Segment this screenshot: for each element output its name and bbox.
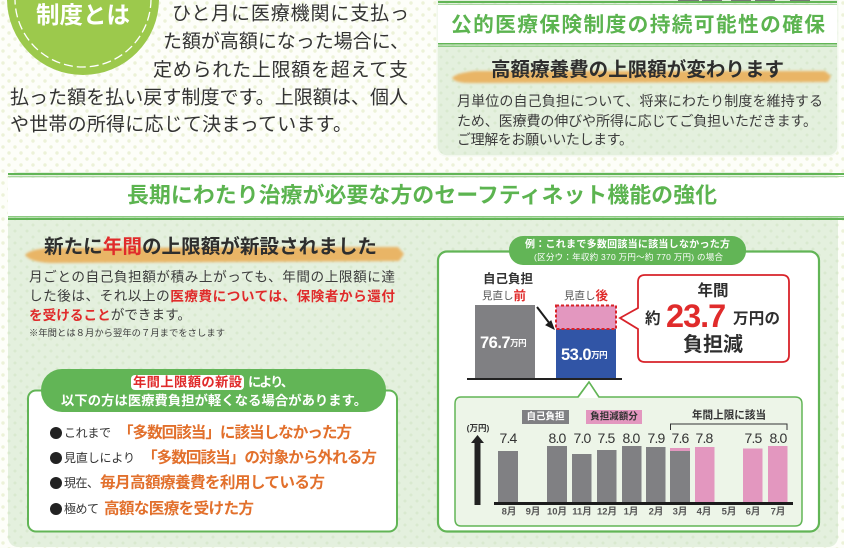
label: after: 見直し後 <box>564 288 608 303</box>
list item 4: 極めて <box>64 502 99 516</box>
panel: example calculation <box>438 236 819 532</box>
month labels: 6月 <box>746 506 760 518</box>
panel: monthly bar chart <box>455 382 802 526</box>
banner: 年間上限額の新設 <box>133 374 242 390</box>
callout: annual reduction <box>620 275 789 362</box>
values: 7.8 <box>695 430 714 446</box>
values: 7.5 <box>597 430 616 446</box>
callout: annual reduction: 年間 <box>697 280 729 300</box>
month labels: 2月 <box>649 506 663 518</box>
month labels: 12月 <box>597 506 617 518</box>
heading: sustainability: 公的医療保険制度の持続可能性の確保 <box>451 14 825 36</box>
month labels: 5月 <box>722 506 736 518</box>
text block: panel body <box>457 93 823 148</box>
values: 7.5 <box>744 430 763 446</box>
banner: により、 <box>248 374 294 390</box>
list item 2: 見直しにより <box>64 450 135 465</box>
example banner <box>509 236 746 265</box>
list item 1: これまで <box>64 426 111 440</box>
right margin strip <box>838 221 844 548</box>
text block: panel body: ご理解をお願いいたします。 <box>457 132 633 148</box>
text block: annual limit explanation: した後は、それ以上の医療費については、保険者から還付 <box>29 288 395 304</box>
list item 2 <box>50 448 377 466</box>
bar: reduction <box>556 306 616 329</box>
values: 7.6 <box>671 430 690 446</box>
list item 2: 「多数回該当」の対象から外れる方 <box>142 448 377 466</box>
text block: annual limit explanation <box>29 270 395 338</box>
bar: after 53.0 <box>556 329 616 378</box>
month labels: 10月 <box>547 506 567 518</box>
values <box>499 430 788 446</box>
text block: system description: ひと月に医療機関に支払っ <box>172 2 409 24</box>
unit and arrow: (万円) <box>467 423 489 433</box>
month labels: 3月 <box>673 506 687 518</box>
list item 1: 「多数回該当」に該当しなかった方 <box>118 422 352 442</box>
values: 8.0 <box>622 430 641 446</box>
legend: reduction <box>586 410 642 424</box>
text block: system description: 払った額を払い戻す制度です。上限額は、個人 <box>10 86 408 108</box>
values: 7.4 <box>499 430 518 446</box>
text block: panel body: ため、医療費の伸びや所得に応じてご負担いただきます。 <box>457 113 817 129</box>
text block: annual limit explanation: を受けることができます。 <box>29 306 191 322</box>
callout: annual reduction: 23.7 <box>666 298 725 334</box>
values: 7.9 <box>647 430 666 446</box>
example banner: 例：これまで多数回該当に該当しなかった方 <box>525 238 730 250</box>
bar: before 76.7: 76.7万円 <box>480 334 526 352</box>
heading: safety net: 長期にわたり治療が必要な方のセーフティネット機能の強化 <box>127 182 717 208</box>
callout: annual reduction: 負担減 <box>683 332 743 356</box>
bar: after 53.0: 53.0万円 <box>561 346 607 364</box>
legend: reduction: 負担減額分 <box>590 410 638 422</box>
baseline <box>467 378 622 380</box>
panel: who benefits <box>28 369 397 532</box>
label: annual limit applies <box>670 408 787 430</box>
values: 8.0 <box>548 430 567 446</box>
month labels: 11月 <box>572 506 592 518</box>
label: annual limit applies: 年間上限に該当 <box>692 408 766 422</box>
unit and arrow <box>467 423 489 505</box>
banner: 以下の方は医療費負担が軽くなる場合があります。 <box>61 392 367 408</box>
text block: system description <box>10 2 409 136</box>
callout: annual reduction: 約 <box>645 310 661 328</box>
callout: annual reduction: 万円の <box>733 310 780 328</box>
month labels: 8月 <box>502 506 516 518</box>
list item 3: 毎月高額療養費を利用している方 <box>100 472 325 492</box>
text block: system description: 定められた上限額を超えて支 <box>153 59 408 81</box>
panel: sustainability of public insurance <box>437 0 838 156</box>
subheading: limits are changing: 高額療養費の上限額が変わります <box>491 58 784 81</box>
subheading: new annual limit: 新たに年間の上限額が新設されました <box>44 235 377 258</box>
month labels: 1月 <box>624 506 638 518</box>
month labels: 4月 <box>697 506 711 518</box>
badge: 制度とは: 制度とは <box>36 2 130 28</box>
example banner: (区分ウ：年収約 370 万円～約 770 万円) の場合 <box>534 252 723 262</box>
brush highlight <box>25 247 404 263</box>
values: 7.0 <box>573 430 592 446</box>
panel: long-term treatment safety net <box>8 172 844 547</box>
text block: annual limit explanation: 月ごとの自己負担額が積み上がっても、年間の上限額に達 <box>29 270 395 284</box>
list item 1 <box>50 422 352 442</box>
list item 3: 現在、 <box>64 476 99 490</box>
month labels: 9月 <box>526 506 540 518</box>
text block: system description: や世帯の所得に応じて決まっています。 <box>10 114 352 136</box>
text block: system description: た額が高額になった場合に、 <box>163 30 409 52</box>
text block: panel body: 月単位の自己負担について、将来にわたり制度を維持する <box>457 93 823 109</box>
label: 自己負担: 自己負担 <box>483 271 533 286</box>
list item 4 <box>50 498 254 518</box>
arrow: before to after <box>537 307 554 329</box>
bars <box>498 446 788 502</box>
values: 8.0 <box>769 430 788 446</box>
list item 4: 高額な医療を受けた方 <box>104 498 254 518</box>
brush highlight <box>452 71 831 83</box>
bar: before 76.7 <box>475 305 535 378</box>
legend: self-pay <box>522 410 569 424</box>
legend: self-pay: 自己負担 <box>526 410 565 422</box>
month labels <box>502 506 785 518</box>
month labels: 7月 <box>771 506 785 518</box>
footnote: ※年間とは８月から翌年の７月までをさします <box>29 327 225 338</box>
banner <box>41 369 386 412</box>
badge: 制度とは <box>7 0 159 75</box>
axis <box>494 502 793 505</box>
label: before: 見直し前 <box>482 288 526 303</box>
